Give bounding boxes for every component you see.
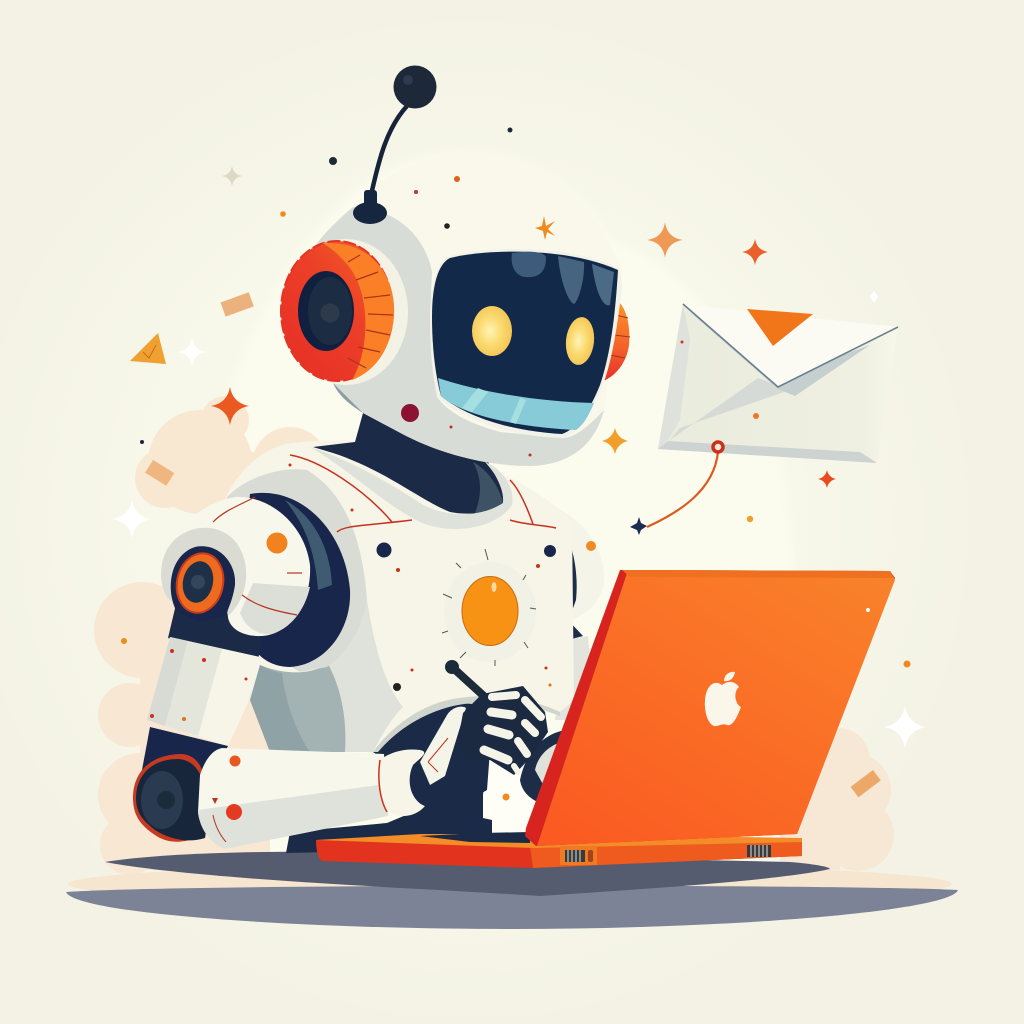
confetti: triangle bbox=[130, 333, 166, 364]
sparkle: red left bbox=[211, 387, 249, 425]
torso bottom lining bbox=[373, 696, 560, 752]
mouth display bbox=[438, 378, 594, 430]
antenna bbox=[371, 66, 436, 195]
hand forearm white bbox=[420, 707, 466, 785]
confetti: left rectangle bbox=[145, 460, 174, 486]
laptop lid bbox=[525, 570, 895, 846]
left ear bbox=[281, 241, 394, 381]
wrist dark bbox=[411, 750, 490, 806]
shoulder lower grey patch bbox=[240, 583, 310, 634]
ear white ring bbox=[284, 239, 408, 385]
navy armpit bbox=[240, 493, 350, 667]
envelope flap bbox=[683, 304, 898, 387]
head specks bbox=[414, 176, 532, 456]
envelope orange triangle bbox=[747, 309, 813, 346]
upper arm white band bbox=[147, 637, 260, 746]
sparkle: beige top bbox=[222, 166, 242, 186]
chest red seam lines bbox=[290, 455, 556, 532]
head shell bbox=[316, 153, 622, 466]
stylus bbox=[445, 660, 486, 698]
sparkle: orange large bbox=[647, 222, 683, 258]
keyboard bbox=[420, 832, 530, 843]
sparkle: white right bbox=[884, 706, 926, 748]
ground grey ellipse bbox=[66, 886, 958, 929]
head star bbox=[535, 216, 555, 240]
envelope left panel bbox=[658, 304, 690, 449]
left vent bbox=[560, 846, 597, 865]
collar bbox=[310, 447, 513, 529]
chest dots bbox=[288, 464, 556, 691]
right arm behind laptop bbox=[520, 503, 604, 805]
sparkle: orange red bbox=[742, 239, 768, 265]
sparkle: white left top bbox=[178, 338, 206, 366]
scattered dots bbox=[121, 128, 910, 800]
hand bbox=[458, 686, 548, 775]
shoulder outer grey band bbox=[227, 469, 367, 672]
peach clouds right bbox=[780, 728, 894, 871]
right ear bbox=[600, 297, 630, 382]
shoulder navy socket bbox=[171, 546, 235, 622]
torso lower pale grey band bbox=[328, 600, 403, 752]
envelope body bbox=[658, 304, 898, 463]
visor bbox=[430, 249, 622, 438]
envelope bottom band bbox=[658, 441, 877, 463]
fingers bbox=[484, 695, 541, 772]
left shoulder bbox=[161, 497, 310, 636]
wrist cuff bbox=[378, 749, 425, 816]
upper arm dark sleeve bbox=[168, 600, 262, 660]
peach clouds left upper bbox=[135, 396, 328, 530]
shoulder lens bbox=[179, 558, 217, 606]
chest ring bbox=[444, 562, 536, 662]
neck bbox=[313, 413, 503, 514]
pedestal and lower torso dark bbox=[286, 703, 500, 853]
torso lower dark grey band bbox=[250, 664, 345, 752]
ear lens bbox=[298, 271, 354, 351]
shoulder grey ring bbox=[161, 528, 246, 615]
laptop base bbox=[316, 832, 802, 868]
lower upper-arm dark bbox=[142, 727, 228, 770]
sparkle: red small bbox=[818, 470, 836, 488]
shoulder orange dot bbox=[266, 532, 288, 554]
envelope diagonal fold bbox=[670, 378, 790, 440]
sparkle: gold bbox=[602, 428, 628, 454]
background glow blob bbox=[196, 153, 800, 860]
laptop bbox=[316, 570, 895, 868]
robot bbox=[133, 66, 630, 853]
shoulder white ball bbox=[163, 497, 310, 636]
shoulder red seams bbox=[213, 497, 302, 615]
torso bbox=[226, 440, 574, 752]
apple logo bbox=[705, 672, 741, 726]
visor highlights bbox=[512, 252, 546, 277]
head grey left panel bbox=[316, 207, 604, 466]
bright patch behind hand bbox=[483, 760, 560, 838]
elbow joint bbox=[133, 754, 208, 842]
ground dark shadow bbox=[105, 852, 830, 896]
confetti: top left rectangle bbox=[221, 292, 254, 317]
antenna base bbox=[353, 190, 387, 224]
right eye bbox=[564, 316, 596, 366]
forearm bbox=[198, 748, 388, 849]
sparkle: pale right bbox=[870, 291, 878, 303]
peach clouds left lower bbox=[94, 582, 270, 875]
right vent bbox=[747, 845, 771, 857]
ground peach ellipse bbox=[68, 864, 952, 904]
envelope bbox=[658, 304, 898, 463]
envelope flap shadow bbox=[690, 312, 870, 396]
torso white shell bbox=[226, 440, 574, 752]
left eye bbox=[472, 306, 512, 356]
cheek bolt bbox=[401, 404, 419, 422]
chest orange button bbox=[462, 576, 518, 646]
shoulder orange ring bbox=[171, 549, 229, 617]
trailing line with ring bbox=[630, 442, 723, 535]
sparkle: white left bbox=[113, 500, 151, 538]
head bbox=[281, 66, 630, 466]
confetti: right rectangle bbox=[851, 770, 881, 797]
